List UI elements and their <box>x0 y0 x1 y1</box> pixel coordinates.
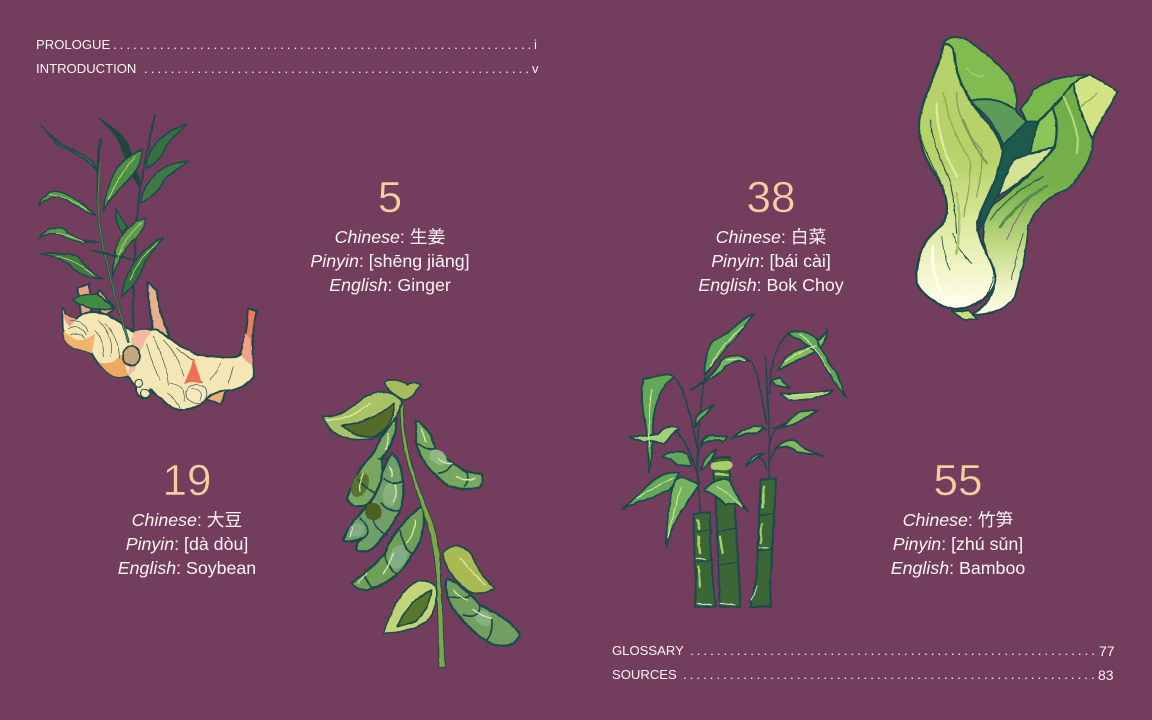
entry: soybean: Pinyin: [dà dòu] <box>126 534 248 554</box>
ginger stems and leaves <box>39 115 188 342</box>
entry: ginger: 5 <box>378 173 402 222</box>
entry: bok choy: Chinese: 白菜 <box>716 226 826 246</box>
bamboo leaf highlights <box>637 327 830 537</box>
pod highlights <box>327 403 492 618</box>
ginger root <box>62 282 257 410</box>
table of contents: prologue: i <box>534 37 537 52</box>
entry: bamboo: 55 <box>934 456 982 505</box>
soybean pods <box>343 418 520 646</box>
bamboo stalks <box>693 457 776 607</box>
entry: bamboo: Pinyin: [zhú sǔn] <box>893 534 1023 554</box>
entry: bamboo: Chinese: 竹笋 <box>903 510 1013 530</box>
entry: soybean: English: Soybean <box>118 558 256 578</box>
entry: bamboo <box>891 456 1025 578</box>
icon: soybean branch <box>323 380 520 667</box>
entry: bok choy <box>698 173 844 294</box>
entry: bok choy: English: Bok Choy <box>698 274 844 294</box>
table of contents: prologue: ................................................................ <box>113 37 531 52</box>
table of contents: glossary: GLOSSARY <box>612 643 684 658</box>
entry: bok choy: 38 <box>747 173 795 222</box>
right stalk <box>972 75 1117 315</box>
pod silhouettes <box>343 418 520 646</box>
entry: ginger: Chinese: 生姜 <box>335 226 445 246</box>
bamboo stems <box>673 335 790 512</box>
soybean stem <box>400 403 445 667</box>
table of contents: glossary: .............................................................. <box>690 643 1094 658</box>
base stub <box>952 311 977 320</box>
icon: bok choy <box>916 37 1117 320</box>
entry: bamboo: English: Bamboo <box>891 558 1025 578</box>
table of contents: introduction: v <box>532 61 539 76</box>
table of contents: sources: SOURCES <box>612 667 677 682</box>
table of contents: glossary: 77 <box>1099 643 1115 659</box>
table of contents: introduction: INTRODUCTION <box>36 61 136 76</box>
bamboo leaves <box>623 314 846 547</box>
bamboo joints <box>694 465 775 605</box>
entry: ginger <box>310 173 470 294</box>
left stalk <box>916 43 1003 309</box>
icon: ginger plant <box>39 115 257 410</box>
table of contents: prologue: PROLOGUE <box>36 37 110 52</box>
entry: soybean <box>118 456 256 578</box>
pod shading <box>347 446 494 629</box>
back leaves <box>943 37 1087 230</box>
entry: soybean: 19 <box>163 456 211 505</box>
icon: bamboo <box>623 314 846 607</box>
table of contents: sources: 83 <box>1098 667 1114 683</box>
pod segment lines <box>358 444 492 640</box>
entry: ginger: Pinyin: [shēng jiāng] <box>310 250 470 270</box>
soybean leaves <box>323 380 495 633</box>
entry: bok choy: Pinyin: [bái cài] <box>711 250 831 270</box>
bok choy veins <box>920 68 1097 307</box>
entry: soybean: Chinese: 大豆 <box>132 510 242 530</box>
entry: ginger: English: Ginger <box>329 274 451 294</box>
table of contents: introduction: ........................................................... <box>144 61 529 76</box>
